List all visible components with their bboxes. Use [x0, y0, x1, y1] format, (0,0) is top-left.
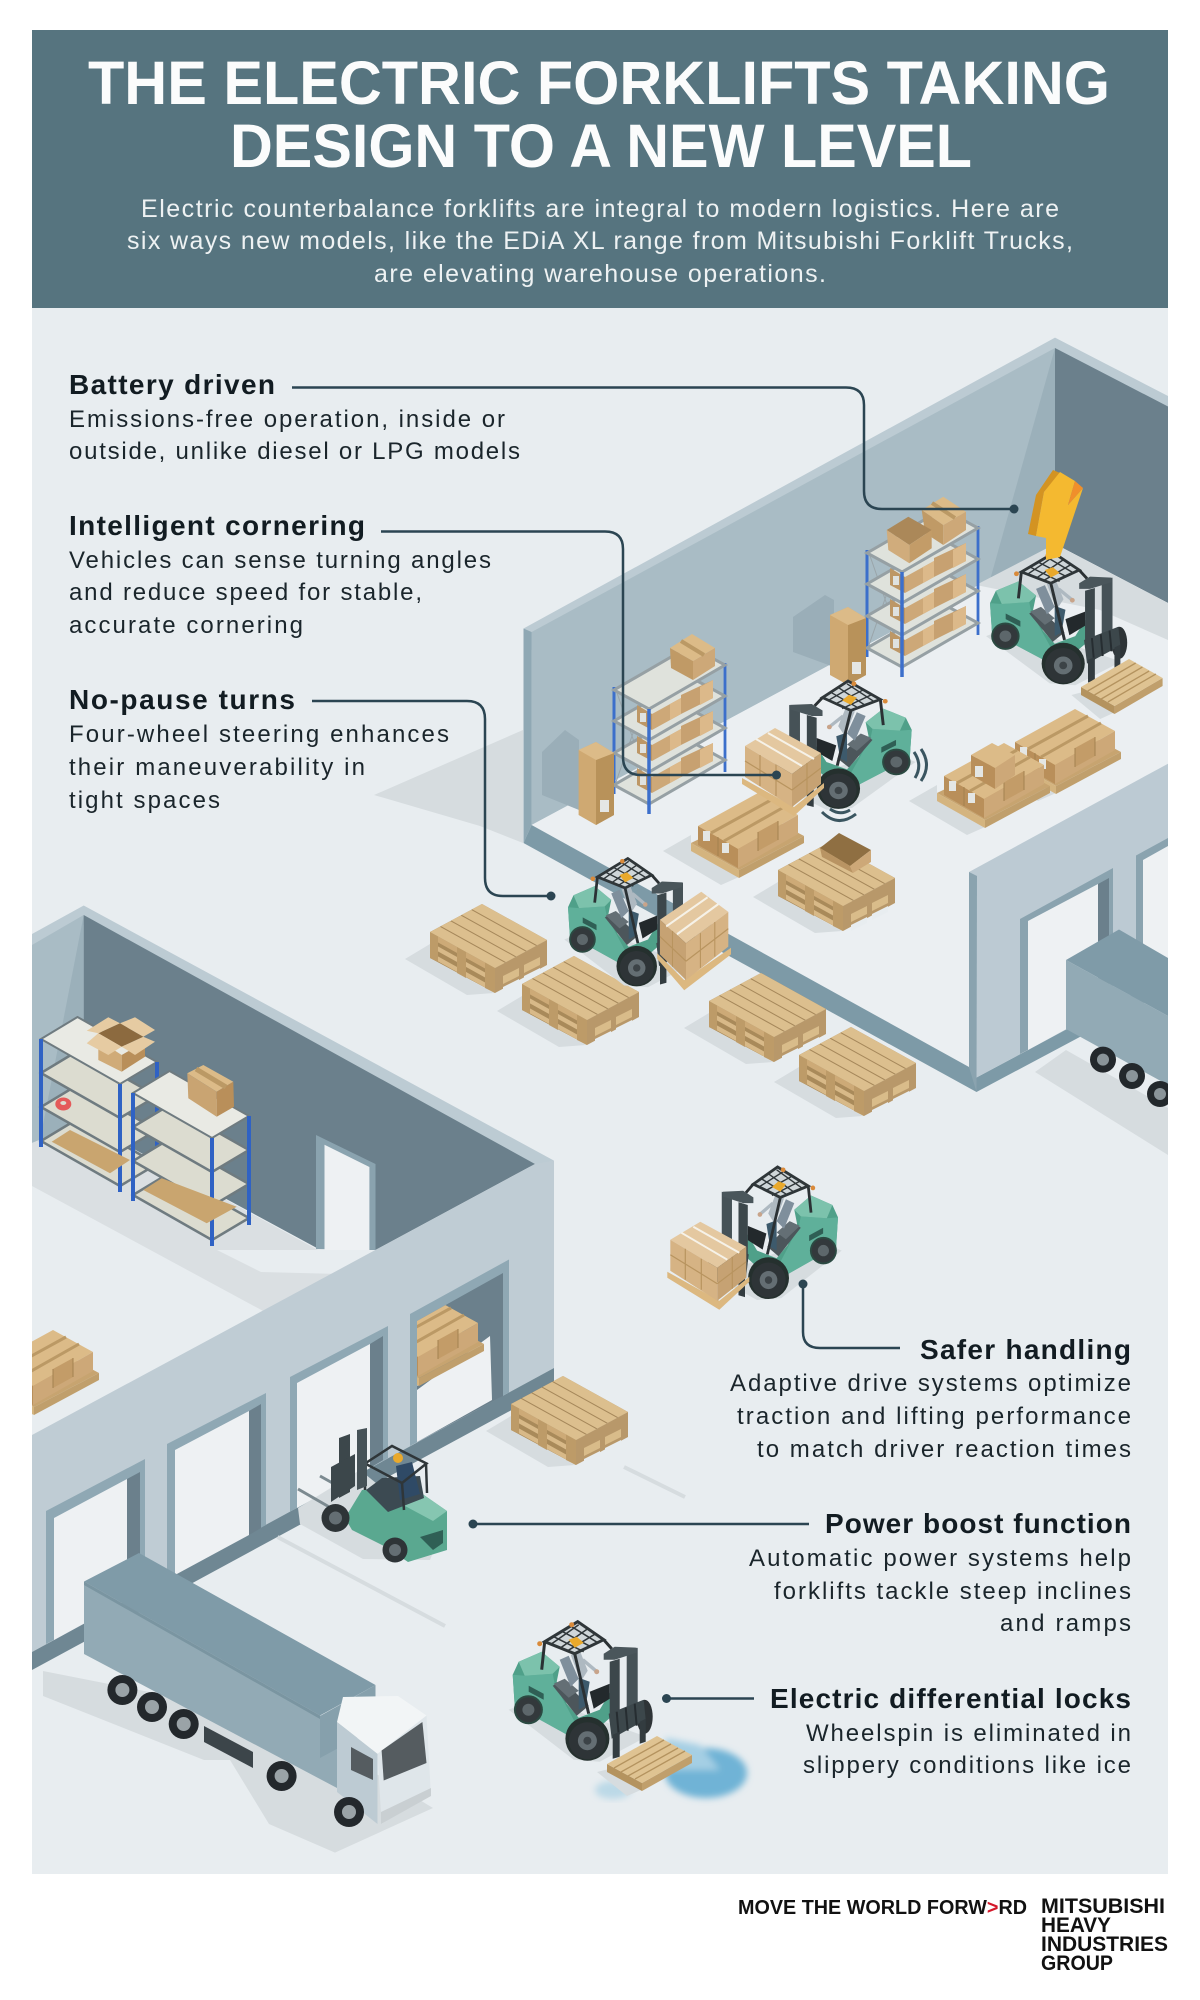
loading bay doors	[46, 1260, 509, 1644]
callout: battery driven: Emissions-free operation, inside or	[69, 406, 505, 433]
leader line: power boost	[468, 1520, 809, 1528]
callout: safer handling	[730, 1280, 1131, 1463]
leader line: safer handling	[798, 1280, 900, 1348]
footer logo text: GROUP	[1041, 1952, 1113, 1975]
callout: safer handling: Adaptive drive systems optimize	[730, 1370, 1131, 1397]
icon: signal waves right	[914, 749, 926, 781]
upper warehouse doors	[1020, 838, 1168, 1054]
pallet stack with open box	[753, 833, 895, 933]
icon: open box on pallet	[820, 833, 871, 873]
wall shadows behind tall boxes	[542, 595, 834, 810]
leader line: no-pause turns	[312, 701, 556, 900]
footer tagline: MOVE THE WORLD FORW>RD	[738, 1897, 1027, 1919]
callout: power boost function: forklifts tackle steep inclines	[774, 1578, 1131, 1605]
callout: no-pause turns: No-pause turns	[69, 684, 295, 715]
icon: box on shelf	[187, 1065, 234, 1117]
forklift: safer handling	[667, 1167, 842, 1310]
forklift: battery driven	[986, 553, 1127, 685]
callout: intelligent cornering	[69, 510, 781, 780]
load: boxes centre	[663, 793, 804, 885]
forklift: power boost	[298, 1428, 447, 1562]
shelving rack upper	[867, 497, 978, 677]
icon: open box on rack	[887, 517, 932, 563]
door 1	[410, 1260, 509, 1446]
icon: closed box on rack	[922, 497, 966, 545]
intro text: Electric counterbalance forklifts are integral to modern logistics. Here are	[141, 195, 1059, 223]
intro text: are elevating warehouse operations.	[374, 260, 826, 288]
flat pallet near battery forklift	[1071, 659, 1163, 719]
callout: power boost function	[468, 1508, 1131, 1637]
callout: no-pause turns: their maneuverability in	[69, 754, 365, 781]
floor guide lines	[278, 1467, 685, 1626]
lower warehouse building	[32, 906, 554, 1670]
door 4	[46, 1459, 145, 1644]
load: boxes right rear	[1015, 709, 1121, 801]
upper truck	[1035, 930, 1173, 1155]
callout: no-pause turns	[69, 684, 556, 900]
puddle large	[665, 1738, 747, 1798]
header panel	[32, 30, 1168, 308]
callout: no-pause turns: Four-wheel steering enhances	[69, 721, 449, 748]
rack right lower warehouse	[133, 1065, 249, 1246]
upper warehouse building	[374, 338, 1168, 1092]
callout: intelligent cornering: accurate cornering	[69, 612, 303, 639]
footer logo text	[1041, 1895, 1168, 1975]
icon: closed box on lower rack	[670, 634, 715, 680]
forklift: electric differential locks with puddle	[509, 1622, 747, 1799]
callout: intelligent cornering: Vehicles can sense turning angles	[69, 547, 491, 574]
callout: power boost function: and ramps	[1000, 1610, 1131, 1637]
load: boxes left edge	[32, 1330, 99, 1415]
callout: no-pause turns: tight spaces	[69, 787, 220, 814]
callout: power boost function: Automatic power systems help	[749, 1545, 1131, 1572]
pallet stack by loading bay	[486, 1376, 628, 1467]
illustration panel background	[32, 308, 1168, 1874]
tall box lower	[579, 742, 614, 825]
lower truck	[43, 1553, 433, 1853]
title: DESIGN TO A NEW LEVEL	[230, 112, 972, 180]
forklift: intelligent cornering	[742, 681, 926, 821]
footer logo text: HEAVY	[1041, 1914, 1111, 1937]
truck cab	[334, 1696, 431, 1827]
puddle small	[595, 1781, 631, 1799]
callout: intelligent cornering: and reduce speed for stable,	[69, 579, 422, 606]
callout: battery driven: Battery driven	[69, 369, 275, 400]
forklift: no-pause turns	[564, 858, 731, 990]
leader line: battery driven	[292, 388, 1018, 514]
door 2	[290, 1326, 388, 1512]
callout: power boost function: Power boost function	[825, 1508, 1131, 1539]
door 3	[167, 1393, 266, 1579]
loading ramp	[298, 1470, 440, 1560]
callout: electric differential locks: Wheelspin is eliminated in	[806, 1720, 1131, 1747]
callout: battery driven: outside, unlike diesel or LPG models	[69, 438, 520, 465]
callout: safer handling: to match driver reaction times	[757, 1436, 1131, 1463]
callout: safer handling: traction and lifting performance	[737, 1403, 1131, 1430]
rack left lower warehouse	[41, 1017, 157, 1192]
icon: open box on shelf	[87, 1017, 155, 1072]
callout: intelligent cornering: Intelligent cornering	[69, 510, 365, 541]
icon: signal waves bottom	[822, 809, 856, 821]
icon: lightning bolt	[1028, 470, 1083, 560]
title: THE ELECTRIC FORKLIFTS TAKING	[88, 49, 1110, 117]
tall box upper	[830, 607, 866, 685]
shelving rack lower	[614, 634, 725, 814]
leader line: intelligent cornering	[381, 532, 781, 780]
callout: electric differential locks: slippery conditions like ice	[803, 1752, 1131, 1779]
leader line: electric differential	[662, 1694, 754, 1703]
callout: electric differential locks	[662, 1683, 1131, 1779]
callout: battery driven	[69, 369, 1018, 514]
back door	[316, 1135, 376, 1250]
pallet stacks by upper wall	[405, 904, 916, 1118]
callout: safer handling: Safer handling	[920, 1334, 1131, 1365]
callout: electric differential locks: Electric differential locks	[770, 1683, 1131, 1714]
icon: box stacked on load	[971, 743, 1015, 789]
icon: red tape roll	[55, 1098, 71, 1110]
intro text: six ways new models, like the EDiA XL range from Mitsubishi Forklift Trucks,	[127, 227, 1073, 255]
title	[88, 49, 1110, 180]
warehouse scene	[0, 338, 1173, 1853]
load: boxes right front	[909, 743, 1050, 835]
intro text	[127, 195, 1073, 288]
footer logo text: MITSUBISHI	[1041, 1895, 1165, 1918]
footer logo text: INDUSTRIES	[1041, 1933, 1168, 1956]
